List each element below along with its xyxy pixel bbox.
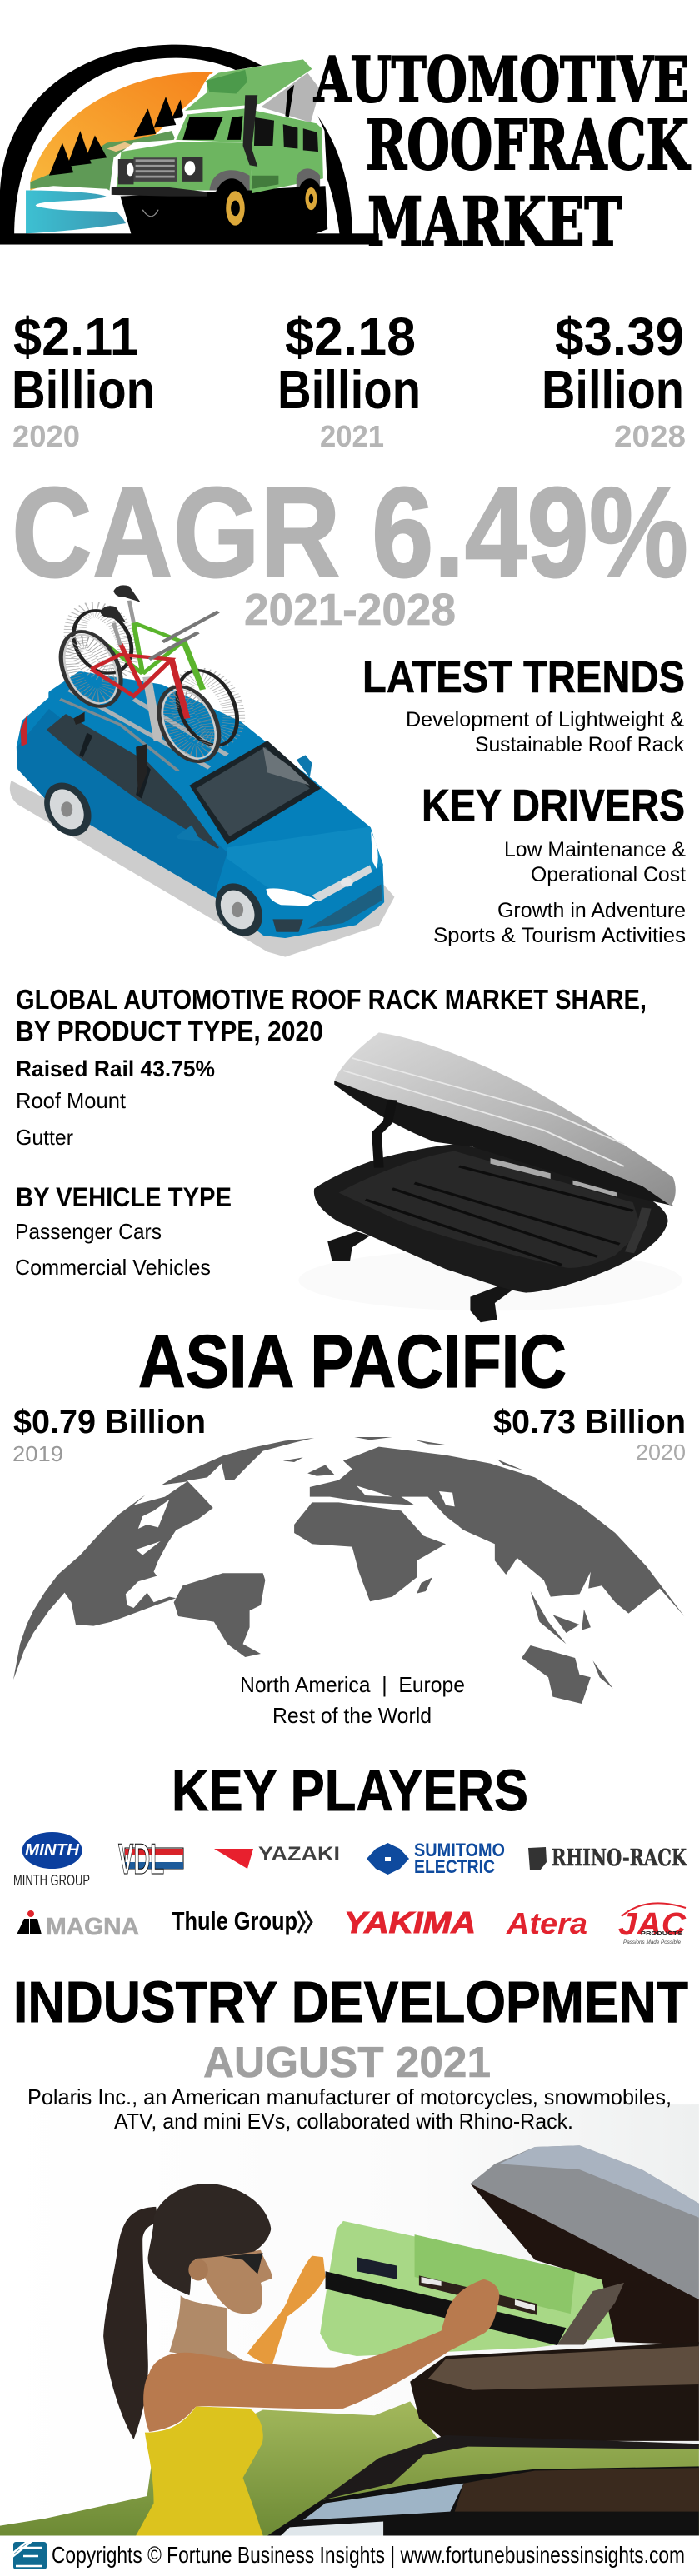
logo: Minth: MINTH GROUP	[13, 1872, 90, 1889]
logo: Minth: MINTH	[25, 1841, 80, 1860]
logo: JAC Products: Passions Made Possible	[623, 1940, 682, 1945]
stat: 2020: 2020	[12, 419, 80, 453]
text: industry development	[13, 1969, 688, 2134]
logo: Sumitomo Electric	[367, 1840, 505, 1877]
value 2020: $0.73 Billion	[493, 1404, 686, 1440]
stat: 2028: $3.39	[555, 307, 684, 367]
panel: latest trends: Development of Lightweight &	[406, 708, 684, 731]
logo: Magna: MAGNA	[46, 1914, 139, 1940]
text: industry development: ATV, and mini EVs, collaborated with Rhino-Rack.	[114, 2109, 573, 2134]
text: industry development: AUGUST 2021	[203, 2039, 491, 2087]
lakes and inlets	[133, 1481, 459, 1555]
logo: Sumitomo Electric: SUMITOMO	[414, 1840, 505, 1860]
panel: by vehicle type	[15, 1182, 232, 1280]
stat: 2021	[277, 307, 421, 453]
panel: market share by product type: Gutter	[16, 1125, 73, 1150]
regional values	[12, 1404, 686, 1466]
stat: 2028	[542, 307, 686, 453]
logo row: key players	[13, 1832, 687, 1945]
heading: Asia Pacific: ASIA PACIFIC	[138, 1320, 567, 1404]
panel: key drivers: Sports & Tourism Activities	[433, 924, 686, 947]
logo: JAC Products: PRODUCTS	[641, 1931, 682, 1937]
other regions: North America | Europe	[240, 1672, 465, 1697]
logo: Atera: Atera	[506, 1906, 587, 1940]
North America	[13, 1438, 314, 1680]
islands	[283, 1437, 613, 1689]
illustration: blue car with bikes on roof rack	[10, 585, 394, 957]
value 2020: 2020	[636, 1440, 686, 1465]
logo: VDL: VDL	[118, 1835, 164, 1884]
text: industry development: Polaris Inc., an American manufacturer of motorcycles, snowmobiles,	[27, 2084, 672, 2109]
other regions	[240, 1672, 465, 1728]
panel: by vehicle type: Passenger Cars	[15, 1219, 162, 1244]
panel: key drivers: Low Maintenance &	[504, 838, 686, 861]
logo: Minth	[13, 1832, 90, 1889]
stat: 2021: $2.18	[285, 307, 416, 367]
logo: Magna	[17, 1910, 139, 1940]
logo: JAC Products: JAC	[618, 1907, 687, 1942]
Eurasia	[310, 1447, 684, 1616]
value 2019: 2019	[12, 1441, 63, 1466]
logo: jeep with rooftop tent in arch	[0, 45, 379, 245]
photo: woman loading suitcase into roof box	[0, 2104, 699, 2536]
panel: market share by product type: Raised Rail 43.75%	[16, 1056, 215, 1081]
panel: by vehicle type: Commercial Vehicles	[15, 1255, 211, 1280]
value 2020	[493, 1404, 686, 1465]
logo: Yakima: YAKIMA	[344, 1905, 476, 1939]
stat: 2020: Billion	[12, 359, 155, 420]
panel: latest trends: Sustainable Roof Rack	[475, 733, 684, 756]
logo: Yazaki	[214, 1843, 340, 1869]
world map	[13, 1437, 684, 1704]
panel: key drivers	[422, 781, 686, 947]
South America	[174, 1573, 265, 1657]
CAGR headline: 2021-2028	[244, 585, 456, 635]
icon: Fortune Business Insights logo	[13, 2542, 47, 2569]
other regions: Rest of the World	[272, 1703, 432, 1728]
panel: market share by product type	[16, 984, 647, 1150]
panel: market share by product type: BY PRODUCT TYPE, 2020	[16, 1016, 323, 1046]
stat: 2021: Billion	[277, 359, 421, 420]
title	[313, 43, 691, 261]
panel: by vehicle type: BY VEHICLE TYPE	[16, 1182, 232, 1212]
value 2019: $0.79 Billion	[13, 1404, 206, 1440]
stat: 2020: $2.11	[13, 307, 138, 367]
logo: Thule Group: Thule Group	[172, 1906, 297, 1935]
illustration: open roof box	[298, 1032, 682, 1322]
market size figures	[12, 307, 686, 453]
heading: key players: KEY PLAYERS	[172, 1758, 528, 1823]
stat: 2028: 2028	[614, 419, 686, 453]
logo: Yazaki: YAZAKI	[258, 1843, 340, 1865]
panel: market share by product type: Roof Mount	[16, 1088, 127, 1113]
panel: latest trends	[362, 652, 685, 756]
stat: 2021: 2021	[320, 419, 384, 453]
title: MARKET	[367, 182, 622, 261]
panel: key drivers: Growth in Adventure	[497, 899, 686, 922]
Madagascar	[417, 1577, 432, 1594]
value 2019	[12, 1404, 206, 1466]
logo: Sumitomo Electric: ELECTRIC	[414, 1856, 495, 1877]
stat: 2020	[12, 307, 155, 453]
panel: key drivers: Operational Cost	[531, 863, 686, 886]
Australia	[522, 1645, 591, 1704]
Africa	[294, 1502, 446, 1601]
